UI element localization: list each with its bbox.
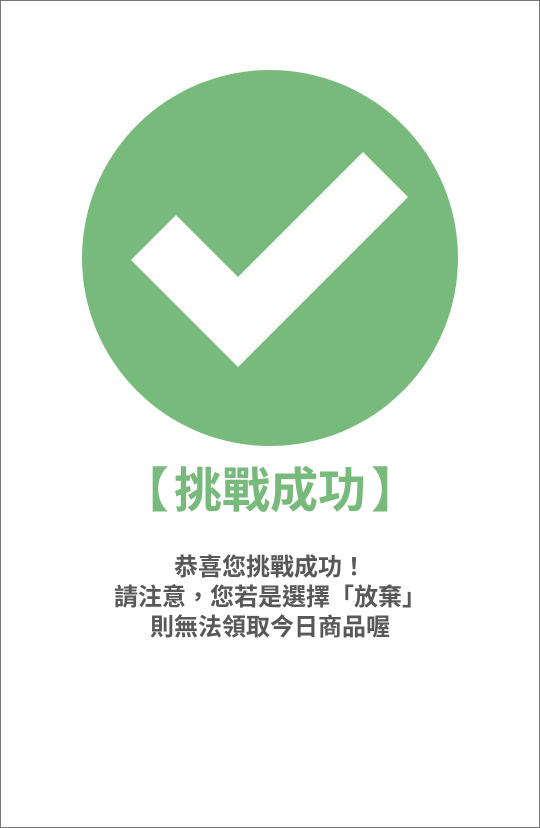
title: 【挑戰成功】 [121, 465, 419, 518]
message text: 則無法領取今日商品喔 [150, 614, 390, 641]
message text: 恭喜您挑戰成功！ [174, 554, 366, 581]
message text [114, 554, 426, 641]
message text: 請注意，您若是選擇「放棄」 [114, 584, 426, 611]
icon: green check circle [82, 70, 458, 446]
